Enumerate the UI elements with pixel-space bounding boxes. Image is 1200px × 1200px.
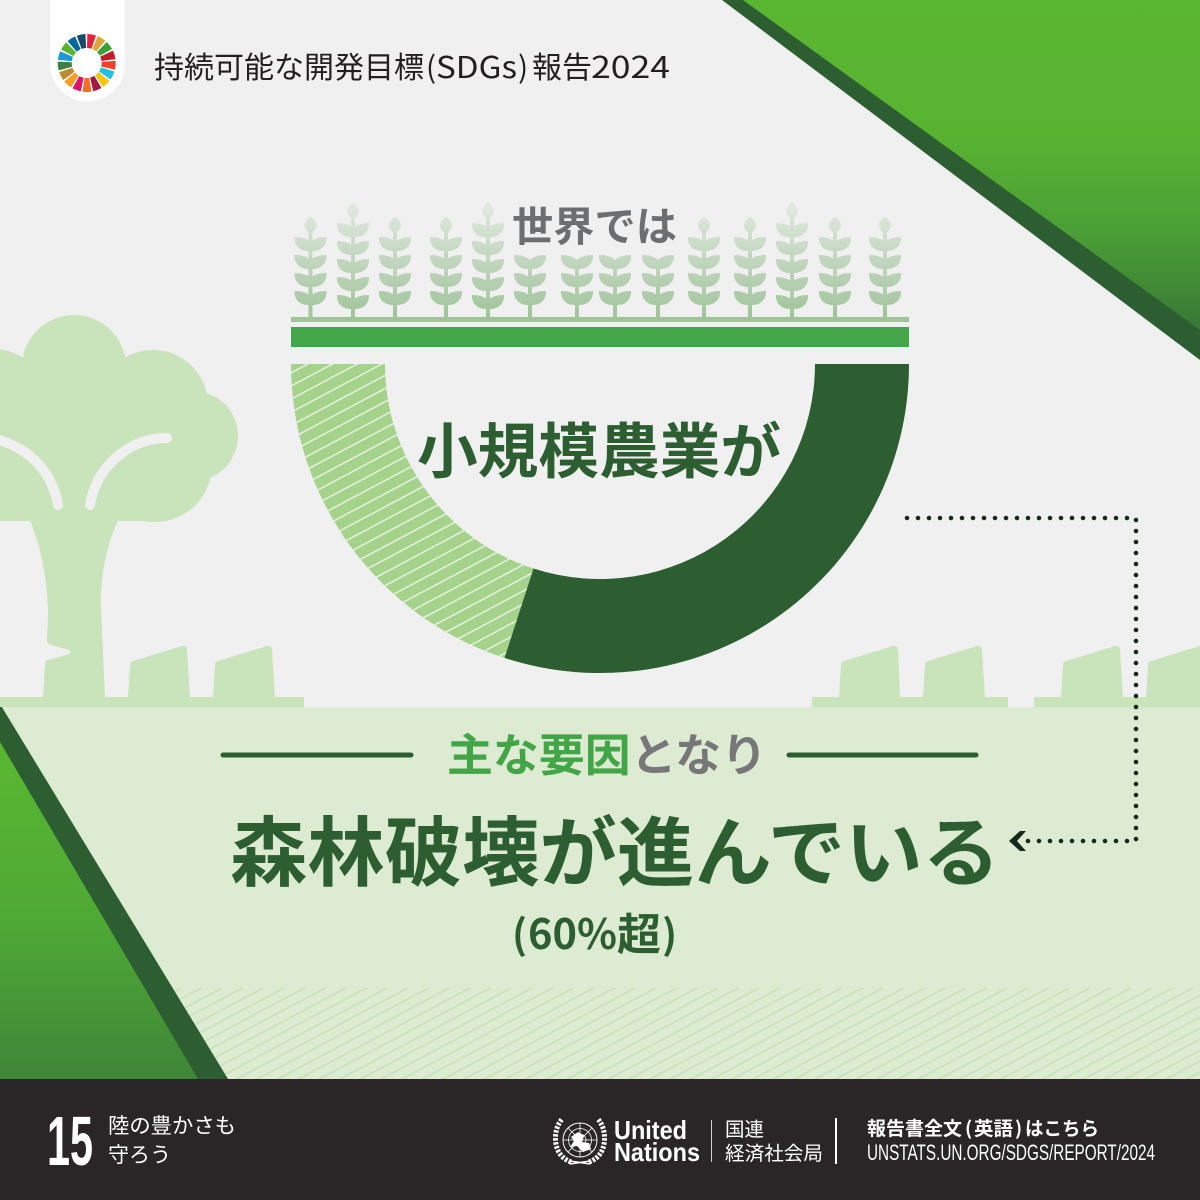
report title: 2024 [591,43,670,87]
heading: 小規模農業が: 小規模農業が [417,404,781,491]
report link label: 英語 [974,1114,1013,1141]
icon: SDG colour wheel [56,33,117,93]
decorative rule: left [223,752,411,758]
United Nations wordmark [614,1115,700,1167]
goal name: 守ろう [108,1139,171,1169]
decorative rule: right [789,752,976,758]
note: 60% [512,899,677,963]
goal name [108,1110,236,1169]
note: 60%: 60% [528,901,617,962]
wheat row [294,202,901,318]
half-donut chart [291,364,909,673]
note: 60%: 超 [617,899,661,963]
note: 60%: ) [662,903,677,961]
goal number: 15 [47,1102,93,1180]
report link label: はこちら [1025,1114,1099,1141]
heading: 世界では: 世界では [512,193,677,253]
lower panel [0,707,1200,1079]
report title: SDGs [436,43,517,87]
footer bar [0,1079,1200,1200]
icon: UN emblem [556,1119,604,1164]
ground and stumps: right [812,646,1200,707]
ground and stumps: left [0,646,304,707]
report title: 持続可能な開発目標 [154,43,424,87]
corner triangle: top right [722,0,1200,360]
main statement: 森林破壊が進んでいる [230,792,1000,902]
report link label: ( [965,1114,972,1141]
report title [154,43,670,87]
UN department name: 経済社会局 [725,1137,823,1166]
report title: 報告 [532,43,592,87]
dotted connector arrow [907,518,1136,851]
report link label: 報告書全文 [867,1114,962,1141]
chart segment: other share (hatched) [291,364,534,658]
report link label [867,1114,1099,1141]
green bar [291,327,909,347]
tree silhouette [0,315,238,697]
divider: thin [711,1120,712,1162]
United Nations wordmark: United [614,1115,687,1145]
divider: thick [835,1118,837,1164]
report link label: ) [1015,1114,1022,1141]
chart segment: small-scale farming share [504,364,909,673]
corner triangle: bottom left [0,704,228,1079]
United Nations wordmark: Nations [614,1137,700,1167]
UN department name: 国連 [725,1113,764,1142]
subheading: 主な要因となり: 主な要因となり [447,719,767,784]
goal name: 陸の豊かさも [108,1110,236,1140]
UN department name [725,1113,823,1166]
note: 60%: ( [512,903,527,961]
logo tab [50,0,125,102]
report title: ) [518,43,528,87]
field ground line [291,317,909,322]
hatched ground pattern [0,988,1200,1079]
report title: ( [426,43,436,87]
